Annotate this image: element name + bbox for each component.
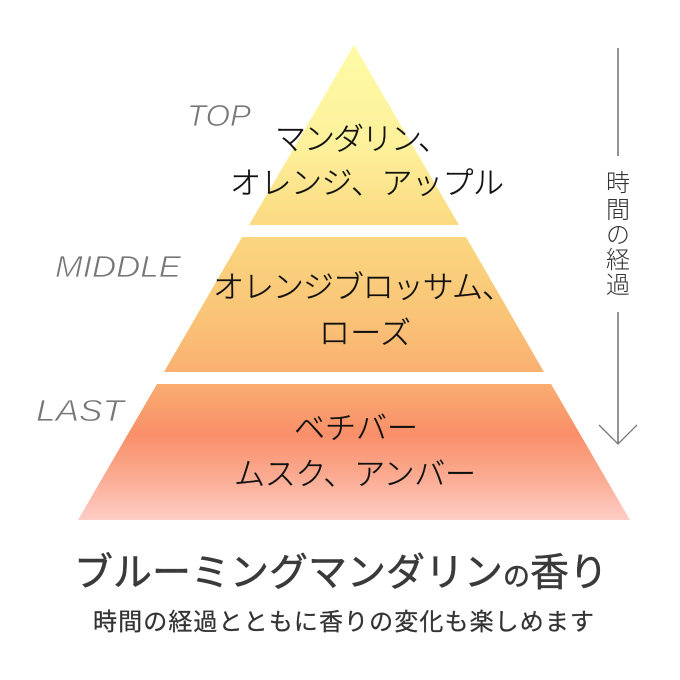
last notes text bbox=[234, 411, 476, 492]
label: LAST: LAST bbox=[36, 393, 126, 428]
pyramid bbox=[78, 45, 630, 520]
middle notes text bbox=[213, 270, 513, 351]
vertical label: 時間の経過: 間 bbox=[606, 197, 630, 224]
subtitle: 時間の経過とともに香りの変化も楽しめます bbox=[93, 609, 594, 636]
middle notes text: オレンジブロッサム、 bbox=[213, 270, 513, 305]
pyramid tier: top bbox=[249, 45, 459, 225]
middle notes text: ローズ bbox=[319, 316, 411, 351]
last notes text: ムスク、アンバー bbox=[234, 457, 476, 492]
vertical label: 時間の経過 bbox=[606, 170, 630, 299]
vertical label: 時間の経過: の bbox=[606, 222, 630, 249]
last notes text: ベチバー bbox=[294, 411, 418, 446]
arrow: passage of time bbox=[599, 48, 637, 444]
pyramid tier: last bbox=[78, 384, 630, 520]
top notes text: マンダリン、 bbox=[275, 122, 449, 157]
label: TOP: TOP bbox=[187, 98, 251, 133]
vertical label: 時間の経過: 過 bbox=[606, 272, 630, 299]
top notes text: オレンジ、アップル bbox=[230, 166, 504, 201]
title: ブルーミングマンダリンの香り bbox=[74, 552, 608, 595]
pyramid tier: middle bbox=[164, 237, 544, 372]
top notes text bbox=[230, 122, 504, 201]
label: MIDDLE: MIDDLE bbox=[55, 249, 181, 284]
vertical label: 時間の経過: 時 bbox=[606, 170, 630, 197]
vertical label: 時間の経過: 経 bbox=[606, 247, 630, 274]
